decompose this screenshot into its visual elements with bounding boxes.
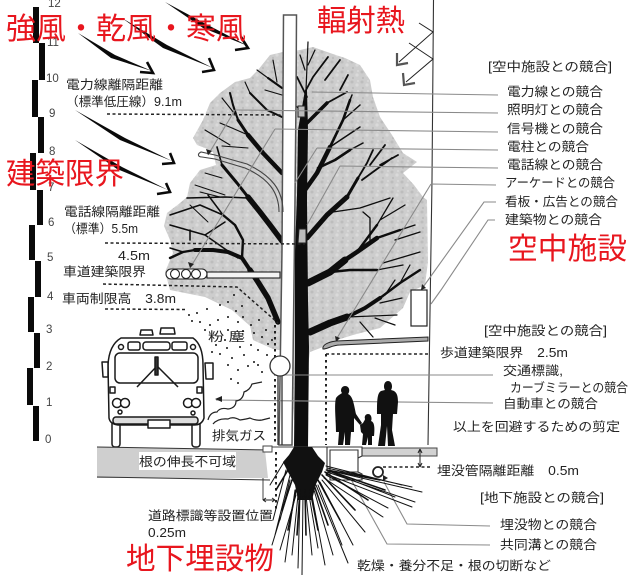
text list: underground conflicts	[357, 463, 604, 573]
text labels: roadside: 排気ガス	[212, 428, 266, 443]
text labels: left clearance values: （標準低圧線）9.1m	[66, 94, 182, 109]
text list: underground conflicts: 共同溝との競合	[500, 538, 598, 552]
text list: lower aerial facility conflicts	[440, 323, 628, 434]
text labels: left clearance values: （標準）5.5m	[64, 221, 138, 236]
text list: lower aerial facility conflicts: 自動車との競合	[503, 397, 599, 411]
scale bar	[27, 0, 61, 446]
text list: aerial facility conflicts: 信号機との競合	[507, 121, 604, 136]
scale bar: 11	[47, 37, 59, 49]
arcade	[323, 337, 428, 349]
text list: aerial facility conflicts: 看板・広告との競合	[505, 195, 618, 209]
people silhouettes	[335, 381, 398, 446]
man	[377, 381, 398, 446]
red headings: 輻射熱	[317, 5, 405, 38]
text list: lower aerial facility conflicts: 歩道建築限界 2.5m	[440, 345, 568, 360]
exhaust gas clouds	[208, 382, 270, 424]
wind arrows	[75, 2, 248, 194]
dust particles	[189, 295, 272, 383]
arrowheads on leaders	[188, 149, 426, 481]
scale bar: 5	[47, 252, 53, 264]
text list: lower aerial facility conflicts: 以上を回避するための剪定	[453, 419, 620, 434]
text labels: left clearance values: 4.5m	[118, 249, 150, 263]
vertical clearance dots	[275, 325, 326, 512]
telephone fixtures on trunk	[298, 106, 306, 243]
scale bar: 4	[47, 291, 54, 303]
text labels: left clearance values: 車両制限高 3.8m	[62, 291, 176, 306]
wind arrow 3	[78, 33, 153, 73]
wind arrow 4	[75, 110, 174, 164]
text labels: roadside	[139, 329, 273, 540]
child	[360, 414, 374, 445]
red headings: 建築限界	[6, 158, 124, 191]
text labels: roadside: 0.25m	[148, 526, 186, 540]
utility pole	[279, 15, 296, 445]
0.25m marker	[263, 498, 275, 502]
street lamp	[198, 152, 283, 212]
text list: lower aerial facility conflicts: [空中施設との競合]	[484, 323, 607, 338]
text labels: left clearance values: 電力線離隔距離	[66, 77, 164, 92]
text list: aerial facility conflicts: [空中施設との競合]	[488, 59, 612, 74]
bus mirrors	[102, 362, 213, 379]
clearance dashed lines	[103, 114, 430, 467]
leader lines	[190, 92, 498, 545]
sidewalk and curb	[263, 446, 437, 456]
text list: aerial facility conflicts: 電話線との競合	[507, 157, 604, 172]
tree branches and trunk	[170, 42, 420, 447]
text list: aerial facility conflicts: 建築物との競合	[505, 212, 603, 227]
heat radiation arrows	[397, 23, 433, 85]
red headings: 空中施設	[508, 233, 627, 266]
wind arrow 1	[165, 2, 248, 50]
scale bar: 10	[46, 73, 59, 85]
scale bar: 3	[46, 324, 52, 336]
text list: aerial facility conflicts: アーケードとの競合	[505, 176, 615, 190]
text labels: roadside: 粉 塵	[208, 329, 245, 344]
text labels: left clearance values: 電話線隔離距離	[64, 204, 161, 219]
scale bar: 7	[48, 182, 54, 194]
text labels: roadside: 道路標識等設置位置	[148, 508, 273, 523]
text list: lower aerial facility conflicts: カーブミラーとの競合	[510, 380, 628, 395]
wind arrow 2	[122, 18, 214, 72]
bus windshield	[115, 353, 198, 383]
scale bar: 1	[46, 397, 52, 409]
scale bar: 6	[48, 217, 54, 229]
bus body	[108, 338, 204, 425]
text list: aerial facility conflicts	[488, 59, 618, 227]
text labels: roadside: 根の伸長不可域	[139, 455, 236, 469]
scale bar: 9	[49, 108, 55, 120]
text labels: left clearance values	[62, 77, 182, 306]
0.5m marker	[418, 449, 422, 467]
roots	[270, 447, 422, 575]
woman	[335, 386, 362, 445]
text list: underground conflicts: [地下施設との競合]	[480, 491, 604, 505]
traffic signal	[166, 269, 280, 279]
text list: underground conflicts: 埋没管隔離距離 0.5m	[437, 463, 579, 478]
buried pipe	[373, 467, 383, 477]
scale bar: 0	[45, 434, 51, 446]
road and rootless zone	[97, 447, 272, 480]
road mirror	[270, 356, 290, 445]
text list: aerial facility conflicts: 照明灯との競合	[507, 103, 604, 117]
bus wheels	[112, 420, 200, 447]
underground utility trench	[327, 447, 362, 480]
wind arrow 5	[75, 140, 170, 194]
bus lights and bumper	[110, 387, 202, 428]
text list: underground conflicts: 乾燥・養分不足・根の切断など	[357, 558, 552, 573]
text list: lower aerial facility conflicts: 交通標識,	[503, 364, 563, 378]
signboard	[411, 290, 427, 326]
text list: aerial facility conflicts: 電柱との競合	[507, 140, 590, 154]
scale bar: 8	[49, 146, 55, 158]
building wall	[428, 0, 434, 445]
text labels: left clearance values: 車道建築限界	[63, 264, 147, 279]
scale bar: 2	[46, 361, 52, 373]
text list: aerial facility conflicts: 電力線との競合	[507, 84, 604, 99]
text list: underground conflicts: 埋没物との競合	[500, 517, 598, 532]
bus	[102, 328, 213, 447]
tree canopy	[164, 47, 428, 420]
red headings: 強風・乾風・寒風	[6, 13, 246, 46]
